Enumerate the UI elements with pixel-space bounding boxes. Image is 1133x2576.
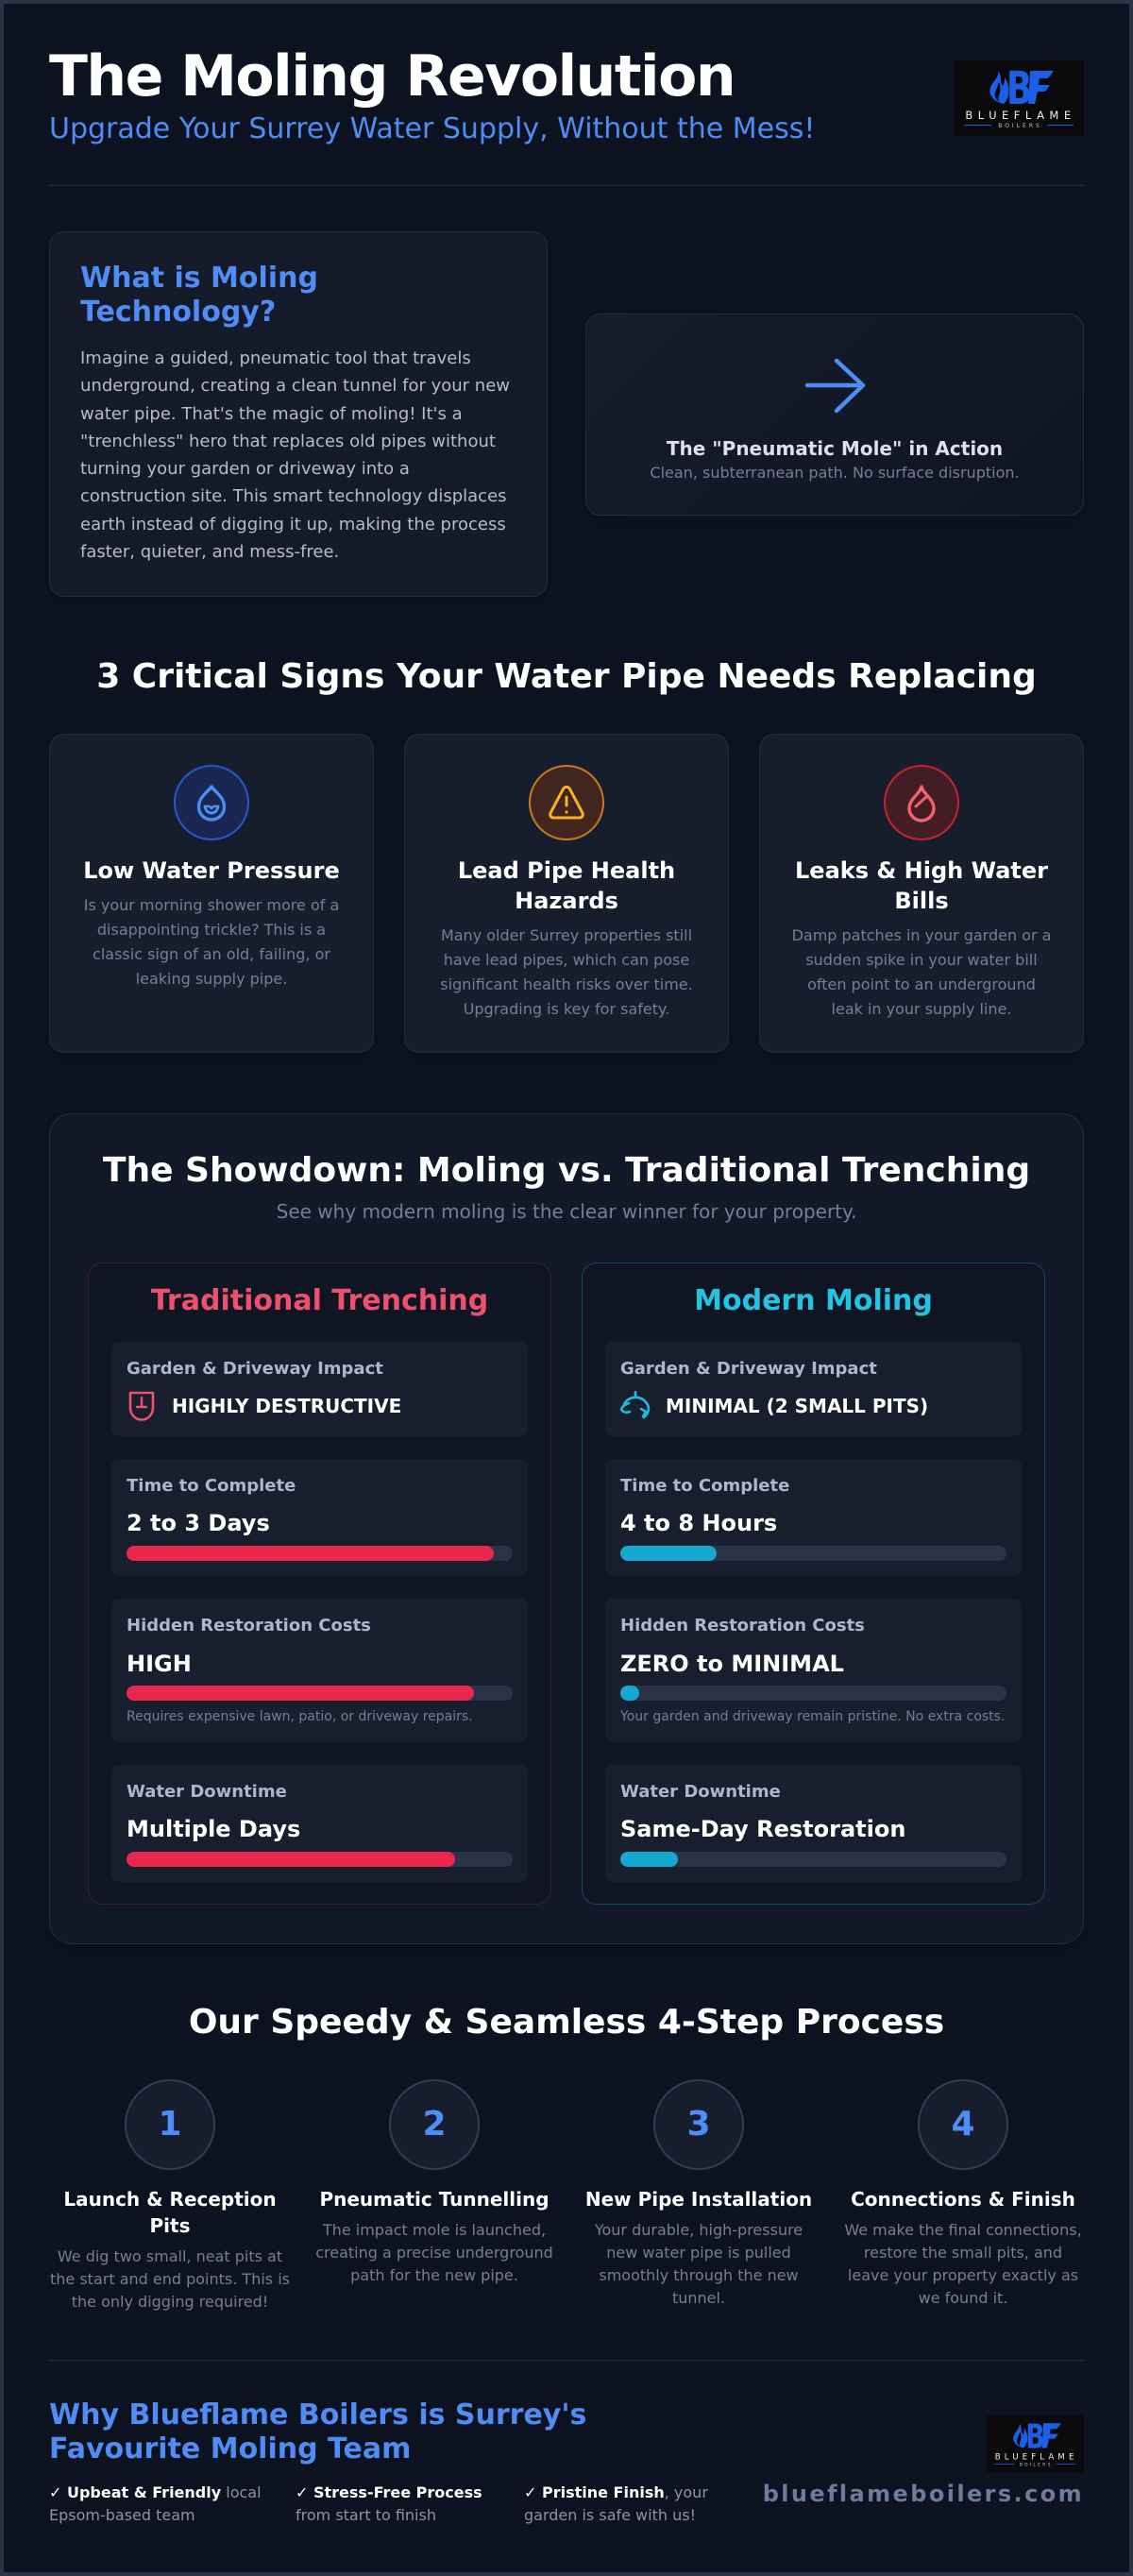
logo: Blueflame Boilers (955, 60, 1084, 136)
card: leaks and bills (759, 734, 1084, 1053)
step number (389, 2079, 480, 2170)
step text: We make the final connections, (844, 2221, 1082, 2239)
metric value: MINIMAL (2 SMALL PITS) (666, 1395, 928, 1417)
footer heading: Why Blueflame Boilers is Surrey's (49, 2398, 586, 2432)
metric value: Same-Day Restoration (620, 1815, 905, 1841)
card text (792, 926, 1051, 1018)
footer point: friendly (49, 2483, 262, 2524)
card text: disappointing trickle? This is a (97, 921, 326, 939)
footer point: finish: garden is safe with us! (524, 2506, 696, 2524)
step text: the only digging required! (72, 2293, 268, 2311)
body text: faster, quieter, and mess-free. (80, 542, 339, 562)
metric label: Garden & Driveway Impact (620, 1359, 877, 1379)
card title: Lead Pipe Health (458, 857, 675, 884)
heading: what is moling: What is Moling (80, 262, 318, 295)
step number: 3 (686, 2105, 711, 2144)
step text (844, 2221, 1082, 2307)
bar: 15% (620, 1852, 1006, 1867)
showdown heading: The Showdown: Moling vs. Traditional Trenching (103, 1151, 1030, 1190)
heading: what is moling (80, 262, 318, 329)
step text: The impact mole is launched, (323, 2221, 546, 2239)
card text: Many older Surrey properties still (441, 926, 692, 944)
step number (653, 2079, 744, 2170)
column: modern moling (582, 1263, 1045, 1905)
step text: leave your property exactly as (848, 2266, 1078, 2284)
step 4 (844, 2079, 1082, 2307)
card: low water pressure (49, 734, 374, 1053)
metric: water downtime (111, 1765, 528, 1882)
metric: restoration costs (111, 1599, 528, 1742)
metric value: ZERO to MINIMAL (620, 1651, 844, 1677)
body text: Imagine a guided, pneumatic tool that travels (80, 348, 471, 368)
footer point: stress-free: ✓ Stress-Free Process (296, 2483, 482, 2501)
metric label: Time to Complete (127, 1476, 296, 1496)
step title: Pits (149, 2214, 190, 2237)
card text: classic sign of an old, failing, or (93, 945, 330, 963)
metric: time to complete (605, 1459, 1022, 1576)
metric: water downtime (605, 1765, 1022, 1882)
body text: underground, creating a clean tunnel for your new (80, 376, 510, 396)
panel: showdown (49, 1113, 1084, 1944)
icon: warning triangle (529, 765, 604, 840)
card title: Low Water Pressure (83, 857, 340, 884)
body text: earth instead of digging it up, making the process (80, 514, 506, 534)
body text: turning your garden or driveway into a (80, 459, 410, 479)
card title: Bills (894, 888, 949, 914)
card text: often point to an underground (807, 975, 1036, 993)
metric value: HIGHLY DESTRUCTIVE (172, 1395, 401, 1417)
footer point: friendly: ✓ Upbeat & Friendly local (49, 2483, 262, 2501)
metric label: Hidden Restoration Costs (620, 1616, 865, 1635)
card text (440, 926, 693, 1018)
footer logo: BOILERS (1020, 2462, 1053, 2467)
logo: Blueflame Boilers: B (1006, 62, 1032, 115)
bar: 25% (620, 1546, 1006, 1561)
metric label: Garden & Driveway Impact (127, 1359, 383, 1379)
card: lead pipe hazards (404, 734, 729, 1053)
step title: Launch & Reception (63, 2188, 277, 2211)
card text: Is your morning shower more of a (84, 896, 339, 914)
heading: critical signs: 3 Critical Signs Your Water Pipe Needs Replacing (96, 657, 1037, 696)
metric note: Requires expensive lawn, patio, or driveway repairs. (127, 1709, 473, 1724)
step text: path for the new pipe. (350, 2266, 518, 2284)
step title: Pneumatic Tunnelling (319, 2188, 550, 2211)
step text (50, 2247, 290, 2311)
mole caption title: The "Pneumatic Mole" in Action (667, 437, 1003, 460)
column heading: Modern Moling (694, 1284, 933, 1317)
card text: Damp patches in your garden or a (792, 926, 1051, 944)
footer point: stress-free: from start to finish (296, 2506, 436, 2524)
step 2 (315, 2079, 553, 2284)
logo: Blueflame Boilers: BLUEFLAME (965, 109, 1076, 122)
bar: 90% (127, 1686, 513, 1701)
step text (315, 2221, 553, 2284)
card text: significant health risks over time. (440, 975, 693, 993)
metric value: HIGH (127, 1651, 192, 1677)
body text (80, 348, 510, 562)
bar: 95% (127, 1546, 513, 1561)
card text: Upgrading is key for safety. (464, 1000, 669, 1018)
metric value: 4 to 8 Hours (620, 1509, 777, 1535)
footer point: finish (524, 2483, 708, 2524)
footer logo: B (1025, 2418, 1045, 2457)
mole caption text: Clean, subterranean path. No surface disruption. (650, 464, 1020, 482)
metric: restoration costs (605, 1599, 1022, 1742)
metric label: Water Downtime (127, 1782, 287, 1802)
subtitle: Upgrade Your Surrey Water Supply, Without the Mess! (49, 112, 815, 145)
column heading: Traditional Trenching (151, 1284, 488, 1317)
footer logo (987, 2415, 1084, 2472)
step title: New Pipe Installation (585, 2188, 812, 2211)
body text: "trenchless" hero that replaces old pipes without (80, 432, 496, 451)
step text: we found it. (919, 2289, 1007, 2307)
metric value: Multiple Days (127, 1815, 300, 1841)
bar: 5% (620, 1686, 1006, 1701)
step text: creating a precise underground (315, 2244, 553, 2262)
card text: have lead pipes, which can pose (444, 951, 689, 969)
icon: water drop (174, 765, 249, 840)
title: The Moling Revolution (49, 43, 735, 110)
card title (458, 857, 675, 914)
bar: 85% (127, 1852, 513, 1867)
metric label: Time to Complete (620, 1476, 789, 1496)
card title: Leaks & High Water (795, 857, 1048, 884)
step text: Your durable, high-pressure (595, 2221, 803, 2239)
step text: We dig two small, neat pits at (58, 2247, 282, 2265)
panel: what is moling (49, 231, 548, 597)
showdown subtitle: See why modern moling is the clear winner for your property. (277, 1200, 856, 1223)
icon: arrow (804, 359, 865, 414)
footer heading (49, 2398, 586, 2466)
step text: smoothly through the new (599, 2266, 799, 2284)
step title: Connections & Finish (851, 2188, 1075, 2211)
card text: leaking supply pipe. (136, 970, 287, 988)
icon: gauge (620, 1391, 650, 1418)
heading: what is moling: Technology? (80, 296, 276, 329)
column: traditional trenching (88, 1263, 551, 1905)
heading: process: Our Speedy & Seamless 4-Step Process (189, 2003, 944, 2042)
footer point: stress-free (296, 2483, 482, 2524)
header divider (49, 185, 1084, 186)
card text (84, 896, 339, 988)
step text: tunnel. (672, 2289, 725, 2307)
card title: Hazards (515, 888, 618, 914)
card text: sudden spike in your water bill (805, 951, 1038, 969)
icon: shield (128, 1392, 155, 1421)
website url: blueflameboilers.com (763, 2481, 1084, 2507)
step 3 (585, 2079, 812, 2307)
metric: time to complete (111, 1459, 528, 1576)
step number: 2 (422, 2105, 447, 2144)
step number: 4 (951, 2105, 975, 2144)
logo: Blueflame Boilers: BOILERS (998, 123, 1042, 129)
metric value: 2 to 3 Days (127, 1509, 270, 1535)
step text (595, 2221, 803, 2307)
body text: water pipe. That's the magic of moling! It's a (80, 404, 463, 423)
footer divider (49, 2360, 1084, 2361)
metric: garden impact (111, 1342, 528, 1436)
metric label: Water Downtime (620, 1782, 781, 1802)
body text: construction site. This smart technology displaces (80, 486, 507, 506)
step text: the start and end points. This is (50, 2270, 290, 2288)
panel: pneumatic mole (585, 314, 1084, 516)
metric: garden impact (605, 1342, 1022, 1436)
step 1 (50, 2079, 290, 2311)
metric label: Hidden Restoration Costs (127, 1616, 371, 1635)
footer logo: BLUEFLAME (995, 2453, 1078, 2463)
step text: new water pipe is pulled (606, 2244, 791, 2262)
step text: restore the small pits, and (864, 2244, 1062, 2262)
step number (125, 2079, 215, 2170)
metric note: Your garden and driveway remain pristine. No extra costs. (620, 1709, 1005, 1724)
card title (795, 857, 1048, 914)
footer point: friendly: Epsom-based team (49, 2506, 195, 2524)
step number (918, 2079, 1008, 2170)
step title (63, 2188, 277, 2237)
icon: leak drop (884, 765, 959, 840)
footer point: finish: ✓ Pristine Finish, your (524, 2483, 708, 2501)
footer heading: Favourite Moling Team (49, 2432, 411, 2466)
step number: 1 (158, 2105, 182, 2144)
card text: leak in your supply line. (832, 1000, 1011, 1018)
